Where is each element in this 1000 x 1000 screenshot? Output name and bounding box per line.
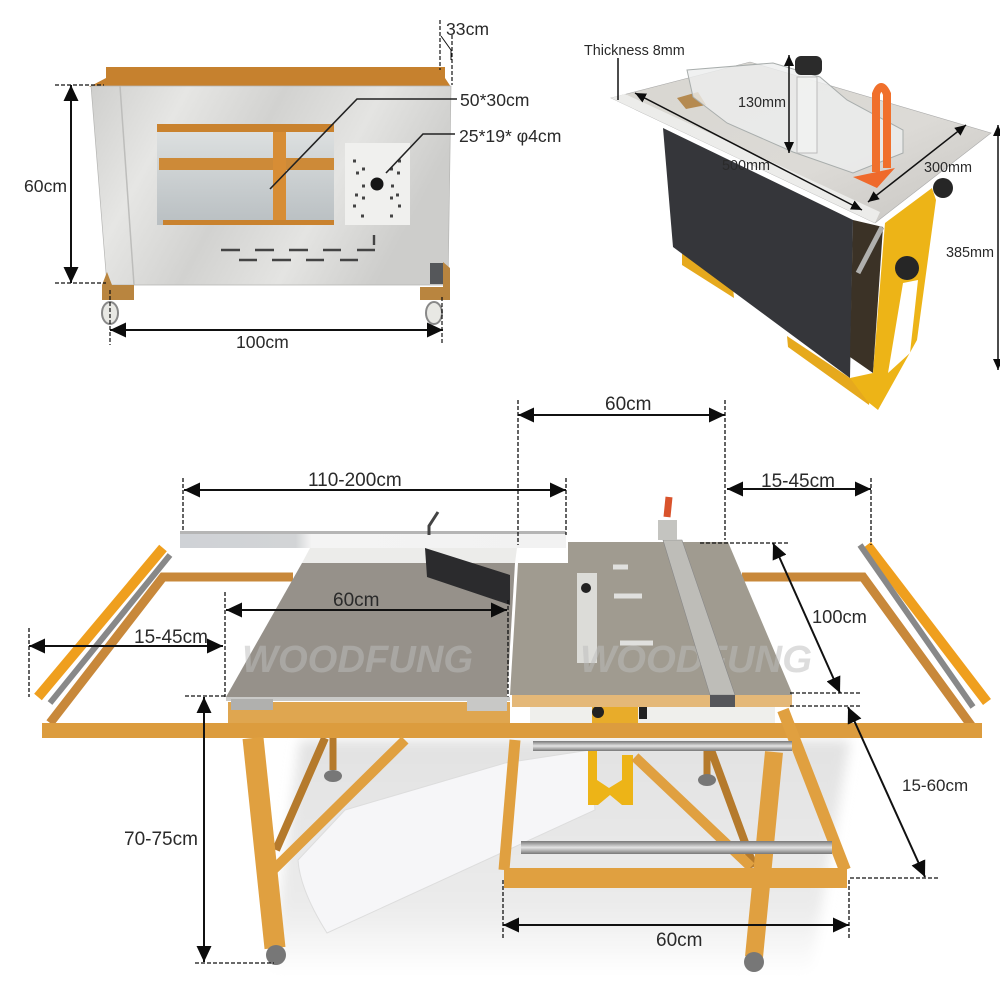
- table labels: 15-45cm: [134, 627, 208, 648]
- cabinet steel body: [91, 86, 451, 285]
- yellow end panel: [850, 188, 936, 410]
- table labels: [124, 394, 968, 951]
- left table: [226, 563, 515, 697]
- yellow feet: [682, 253, 870, 405]
- table labels: 60cm: [333, 590, 379, 611]
- rollers: [521, 741, 832, 854]
- unit labels: [584, 43, 994, 261]
- table labels: 15-45cm: [761, 471, 835, 492]
- cabinet labels: 25*19* φ4cm: [459, 126, 561, 146]
- floor shadow: [270, 740, 850, 975]
- cabinet labels: 100cm: [236, 332, 289, 352]
- router plate: [345, 143, 410, 225]
- cabinet window: [157, 124, 334, 225]
- casters: [102, 262, 450, 324]
- orange handle: [876, 87, 887, 172]
- unit labels: 300mm: [924, 160, 972, 176]
- back legs: [276, 738, 754, 867]
- feet: [266, 945, 764, 972]
- orange handle: [667, 497, 669, 517]
- table labels: 60cm: [605, 394, 651, 415]
- table labels: 110-200cm: [308, 470, 402, 491]
- rail top edge: [180, 531, 566, 534]
- front tray bar: [504, 868, 847, 888]
- legs and braces: [253, 710, 845, 957]
- cabinet top frame: [89, 67, 451, 87]
- table labels: 15-60cm: [902, 776, 968, 795]
- watermarks: WOODFUNG: [580, 639, 812, 681]
- vent slots: [221, 235, 375, 260]
- knobs: [895, 178, 953, 280]
- panel: saw table unit: [584, 43, 998, 410]
- main cross bar: [42, 723, 982, 738]
- dimension lines: [618, 55, 998, 370]
- back feet: [324, 770, 716, 786]
- unit labels: 500mm: [722, 158, 770, 174]
- left table underside: [226, 697, 510, 723]
- end panel cutout: [888, 280, 918, 373]
- left table light top: [302, 548, 517, 563]
- sliding rail: [180, 533, 566, 548]
- mitre fence: [425, 548, 510, 605]
- watermarks: WOODFUNG: [242, 639, 473, 681]
- table slots: [613, 567, 653, 643]
- table front edge: [611, 94, 880, 223]
- cabinet labels: 33cm: [446, 19, 489, 39]
- guard knob: [795, 56, 822, 75]
- rip fence: [658, 520, 735, 707]
- inner mechanism: [850, 220, 883, 373]
- cabinet labels: [24, 19, 561, 352]
- unit labels: 385mm: [946, 245, 994, 261]
- side fold: [120, 86, 134, 285]
- side frames: [50, 577, 973, 728]
- handle base: [853, 168, 895, 188]
- outer fence rails: [38, 545, 987, 707]
- blade guard on table: [577, 573, 597, 663]
- panel: cabinet dimensions: [24, 19, 561, 352]
- dust bag: [298, 750, 595, 933]
- guard column: [797, 77, 817, 153]
- dimension lines: [29, 400, 940, 963]
- panel: full saw table: [29, 394, 987, 975]
- steel table top: [611, 62, 991, 223]
- right table underside: [512, 695, 792, 723]
- cabinet labels: 50*30cm: [460, 90, 529, 110]
- right table: [510, 542, 792, 695]
- yellow motor mount: [588, 750, 633, 805]
- mitre clamp: [429, 512, 438, 535]
- dimension lines: [55, 20, 457, 345]
- black side panel: [663, 128, 853, 378]
- blade slot: [677, 92, 706, 109]
- clear blade guard: [687, 63, 903, 173]
- unit labels: 130mm: [738, 95, 786, 111]
- unit labels: Thickness 8mm: [584, 43, 685, 59]
- gray brace: [858, 227, 882, 273]
- watermarks: [242, 639, 812, 681]
- table labels: 70-75cm: [124, 829, 198, 850]
- cabinet labels: 60cm: [24, 176, 67, 196]
- table labels: 60cm: [656, 930, 702, 951]
- table labels: 100cm: [812, 606, 867, 627]
